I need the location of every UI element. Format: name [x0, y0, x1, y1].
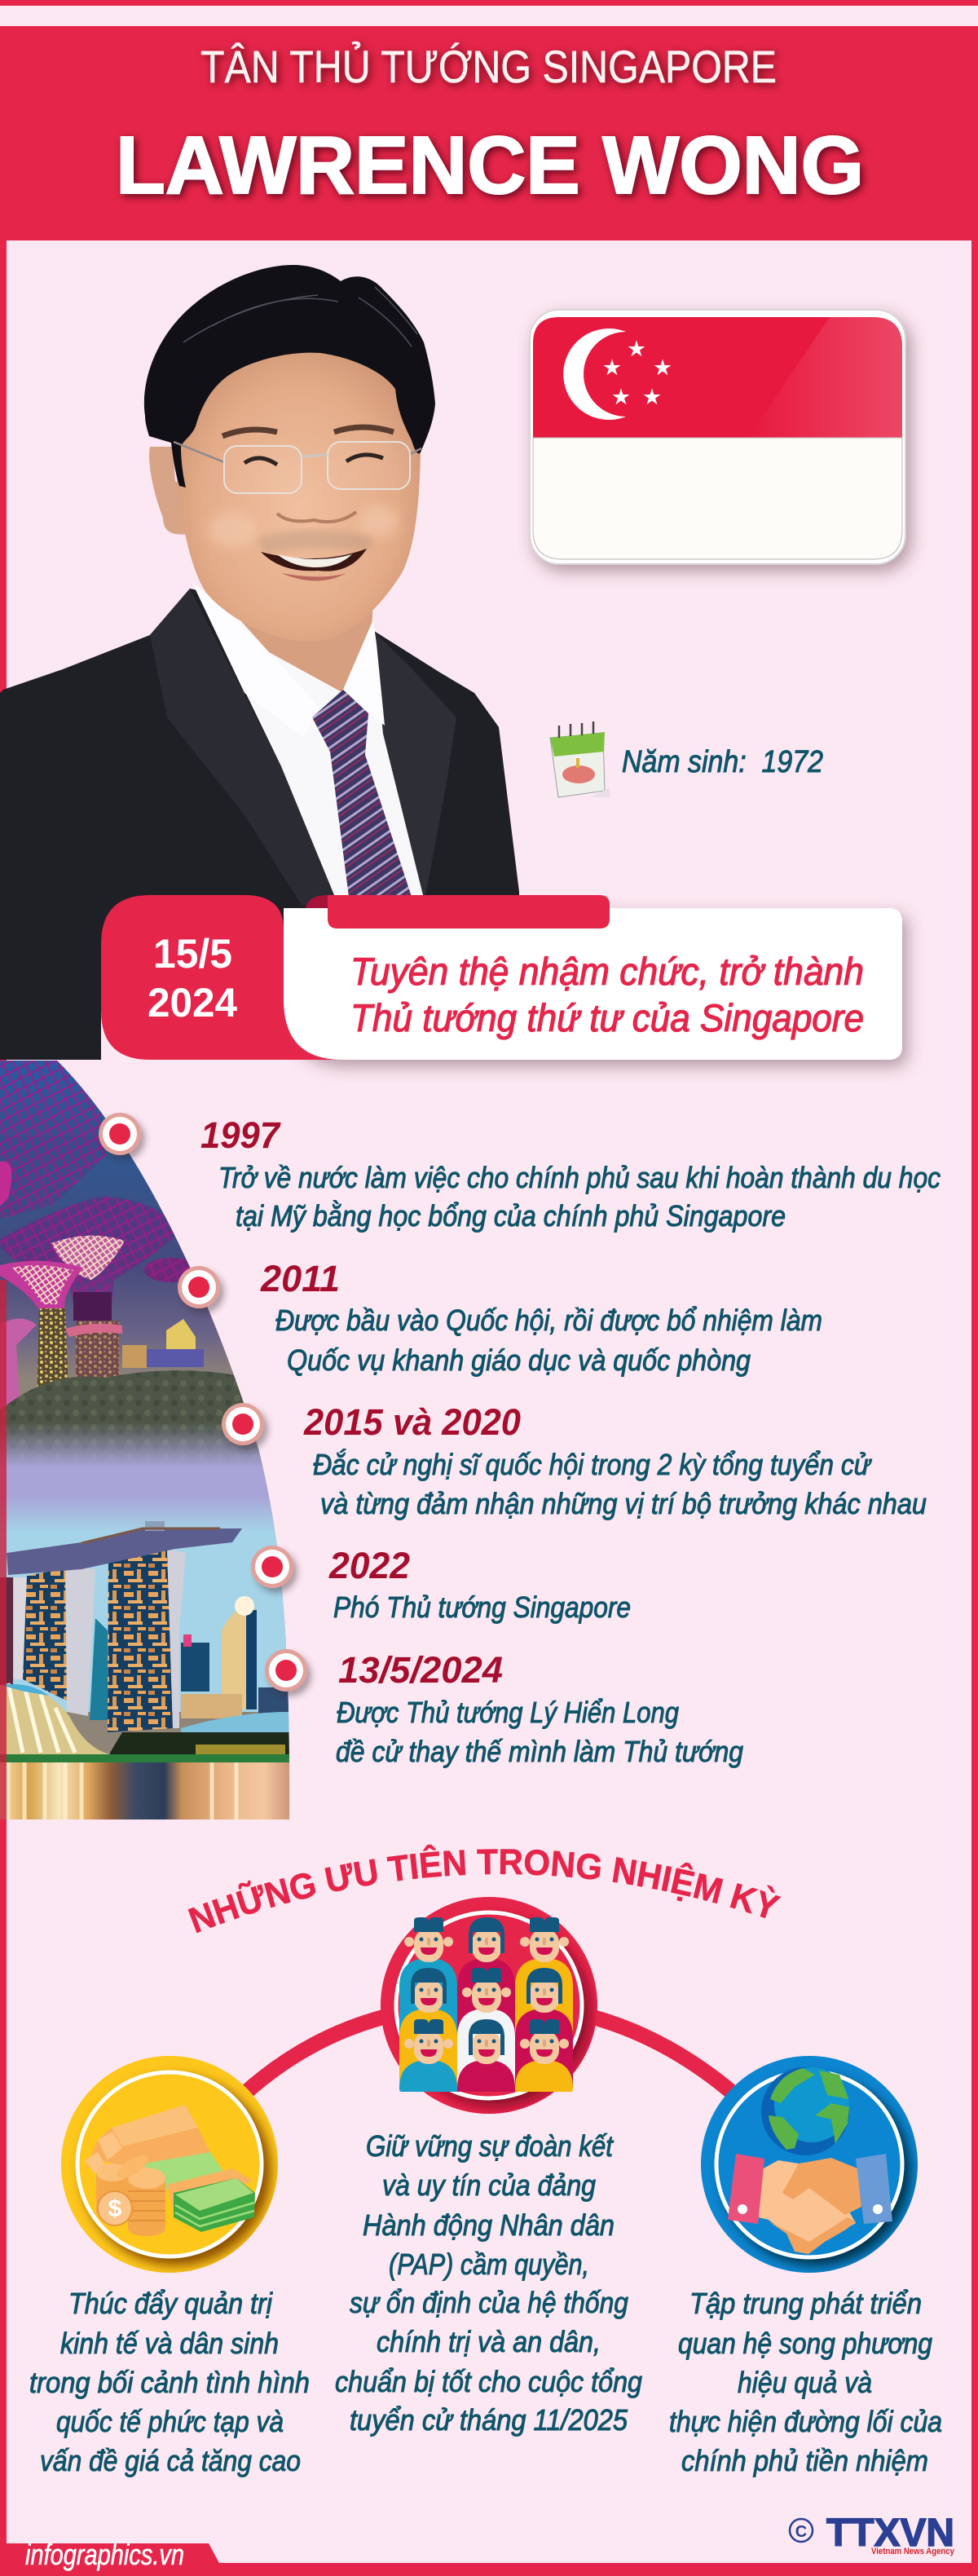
- timeline item 2022: [251, 1545, 631, 1624]
- timeline item 2015 and 2020: [222, 1401, 927, 1520]
- priority text: right: quan hệ song phương: [678, 2327, 932, 2360]
- TTXVN logo: TTXVN: [826, 2512, 954, 2555]
- priority text: centre: [335, 2129, 642, 2437]
- timeline item 13/5/2024: [265, 1649, 743, 1768]
- swearing-in date panel: 2024: [148, 980, 237, 1026]
- tie: [312, 690, 412, 897]
- header banner: [0, 26, 978, 240]
- smile: [261, 549, 367, 571]
- priority text: centre: Hành động Nhân dân: [363, 2208, 615, 2242]
- timeline: [99, 1113, 941, 1768]
- stars: ★: [642, 385, 662, 409]
- middle supertree: [0, 1197, 181, 1382]
- coins: [96, 2172, 129, 2213]
- icon: gold and money: [61, 2056, 278, 2273]
- priority text: left: quốc tế phức tạp và: [56, 2405, 284, 2438]
- facial shading: [208, 512, 257, 548]
- swearing-in date panel: Thủ tướng thứ tư của Singapore: [350, 996, 864, 1039]
- front supertree: [0, 1261, 83, 1410]
- left border over photo: [0, 1280, 7, 1820]
- eyebrows and eyes: [222, 427, 394, 436]
- face: [175, 342, 421, 642]
- marker: [99, 1113, 141, 1155]
- priority text: left: kinh tế và dân sinh: [60, 2327, 279, 2360]
- right buildings: [181, 1643, 209, 1692]
- icon: gold and money: $: [108, 2195, 122, 2222]
- upper supertree: [0, 1061, 106, 1219]
- year: 2022: [328, 1545, 410, 1586]
- priority text: centre: chính trị và an dân,: [377, 2325, 601, 2358]
- priority text: centre: và uy tín của đảng: [382, 2168, 596, 2202]
- priority text: centre: Giữ vững sự đoàn kết: [366, 2129, 615, 2163]
- red date box: [101, 895, 346, 1060]
- portrait of Lawrence Wong: [0, 265, 519, 1060]
- timeline item 1997: [99, 1113, 941, 1233]
- priority text: left: [29, 2287, 310, 2477]
- icon: people: [381, 1897, 597, 2119]
- white panel: [284, 908, 902, 1060]
- priority text: centre: (PAP) cầm quyền,: [389, 2247, 589, 2281]
- priority text: right: chính phủ tiền nhiệm: [681, 2444, 928, 2477]
- marker: [178, 1266, 220, 1308]
- cuffs: [728, 2154, 764, 2224]
- stars: ★: [653, 355, 672, 380]
- birth year: [550, 721, 823, 797]
- marker: [222, 1403, 264, 1445]
- priority text: right: [669, 2287, 942, 2477]
- ear: [149, 447, 189, 535]
- nose: [277, 512, 356, 522]
- water reflection: [0, 1762, 293, 1820]
- collar: [192, 583, 319, 738]
- description: Đắc cử nghị sĩ quốc hội trong 2 kỳ tổng tuyển cử: [313, 1448, 872, 1481]
- TTXVN logo: Vietnam News Agency: [871, 2547, 955, 2556]
- suit: [0, 589, 519, 1060]
- description: Phó Thủ tướng Singapore: [333, 1590, 631, 1624]
- notes: [139, 2152, 224, 2193]
- stars: [602, 337, 672, 409]
- handshake: [758, 2160, 856, 2250]
- globe: [761, 2067, 849, 2155]
- title: name: LAWRENCE WONG: [116, 120, 864, 211]
- priority text: left: vấn đề giá cả tăng cao: [40, 2444, 301, 2477]
- title: subtitle line: TÂN THỦ TƯỚNG SINGAPORE: [200, 41, 777, 92]
- icon: globe and handshake: [701, 2056, 918, 2273]
- year: 13/5/2024: [338, 1649, 503, 1691]
- swearing-in date panel: [101, 895, 902, 1060]
- small supertree right: [144, 1258, 191, 1282]
- hair: [144, 265, 435, 487]
- flag of Singapore: [530, 310, 905, 564]
- timeline item 2011: Quốc vụ khanh giáo dục và quốc phòng: [287, 1343, 751, 1377]
- tower one: [23, 1570, 67, 1700]
- walkway: [65, 1324, 122, 1337]
- priority text: left: Thúc đẩy quản trị: [68, 2287, 273, 2320]
- domes: [181, 1712, 289, 1732]
- trees shoreline: [110, 1732, 289, 1758]
- skypark: [7, 1528, 242, 1575]
- distant buildings: [166, 1319, 196, 1349]
- white panel shadow: [284, 908, 902, 1060]
- foliage: [0, 1370, 269, 1467]
- description: Được bầu vào Quốc hội, rồi được bổ nhiệm làm: [275, 1303, 822, 1337]
- crescent: [563, 329, 626, 420]
- date text: 15/5: [153, 931, 232, 977]
- stars: ★: [627, 337, 646, 361]
- fold: [306, 895, 328, 908]
- timeline item 13/5/2024: đề cử thay thế mình làm Thủ tướng: [336, 1735, 743, 1768]
- connector arcs: [243, 2017, 735, 2095]
- TTXVN logo: C: [795, 2523, 807, 2541]
- priority text: right: hiệu quả và: [738, 2366, 872, 2399]
- stars: ★: [602, 355, 622, 380]
- priority text: centre: tuyển cử tháng 11/2025: [350, 2403, 628, 2437]
- year: 1997: [200, 1114, 281, 1156]
- city photo: Gardens by the Bay and Marina Bay Sands: [0, 1061, 293, 1820]
- marker: [251, 1546, 293, 1588]
- tower two: [108, 1549, 173, 1732]
- priority text: centre: chuẩn bị tốt cho cuộc tổng: [335, 2365, 642, 2398]
- year: 2015 và 2020: [303, 1401, 521, 1443]
- gold bars: [112, 2105, 198, 2146]
- timeline item 1997: tại Mỹ bằng học bổng của chính phủ Singapore: [236, 1199, 786, 1233]
- small blue towers: [90, 1618, 108, 1720]
- priorities heading: NHỮNG ƯU TIÊN TRONG NHIỆM KỲ: [187, 1844, 781, 1934]
- footer bar: [0, 2538, 978, 2576]
- marker: [265, 1649, 307, 1692]
- description: Được Thủ tướng Lý Hiển Long: [337, 1696, 679, 1729]
- priority text: centre: sự ổn định của hệ thống: [350, 2286, 628, 2319]
- timeline item 2015 and 2020: và từng đảm nhận những vị trí bộ trưởng khác nhau: [320, 1487, 927, 1520]
- birth year text: Năm sinh: 1972: [622, 745, 823, 779]
- website: infographics.vn: [25, 2538, 184, 2571]
- glasses: [174, 442, 421, 462]
- shirt: [192, 583, 425, 905]
- event text: Tuyên thệ nhậm chức, trở thành: [350, 950, 864, 993]
- haze fade: [0, 1425, 262, 1467]
- neck: [196, 571, 373, 693]
- tower left: [0, 1577, 13, 1685]
- stars: ★: [611, 385, 631, 409]
- tab: [328, 895, 610, 929]
- year: 2011: [260, 1258, 340, 1299]
- priority text: right: Tập trung phát triển: [689, 2287, 922, 2320]
- timeline item 2011: [178, 1258, 822, 1377]
- priority text: right: thực hiện đường lối của: [669, 2405, 942, 2438]
- icon: calendar: [550, 721, 610, 797]
- priority text: left: trong bối cảnh tình hình: [29, 2366, 310, 2399]
